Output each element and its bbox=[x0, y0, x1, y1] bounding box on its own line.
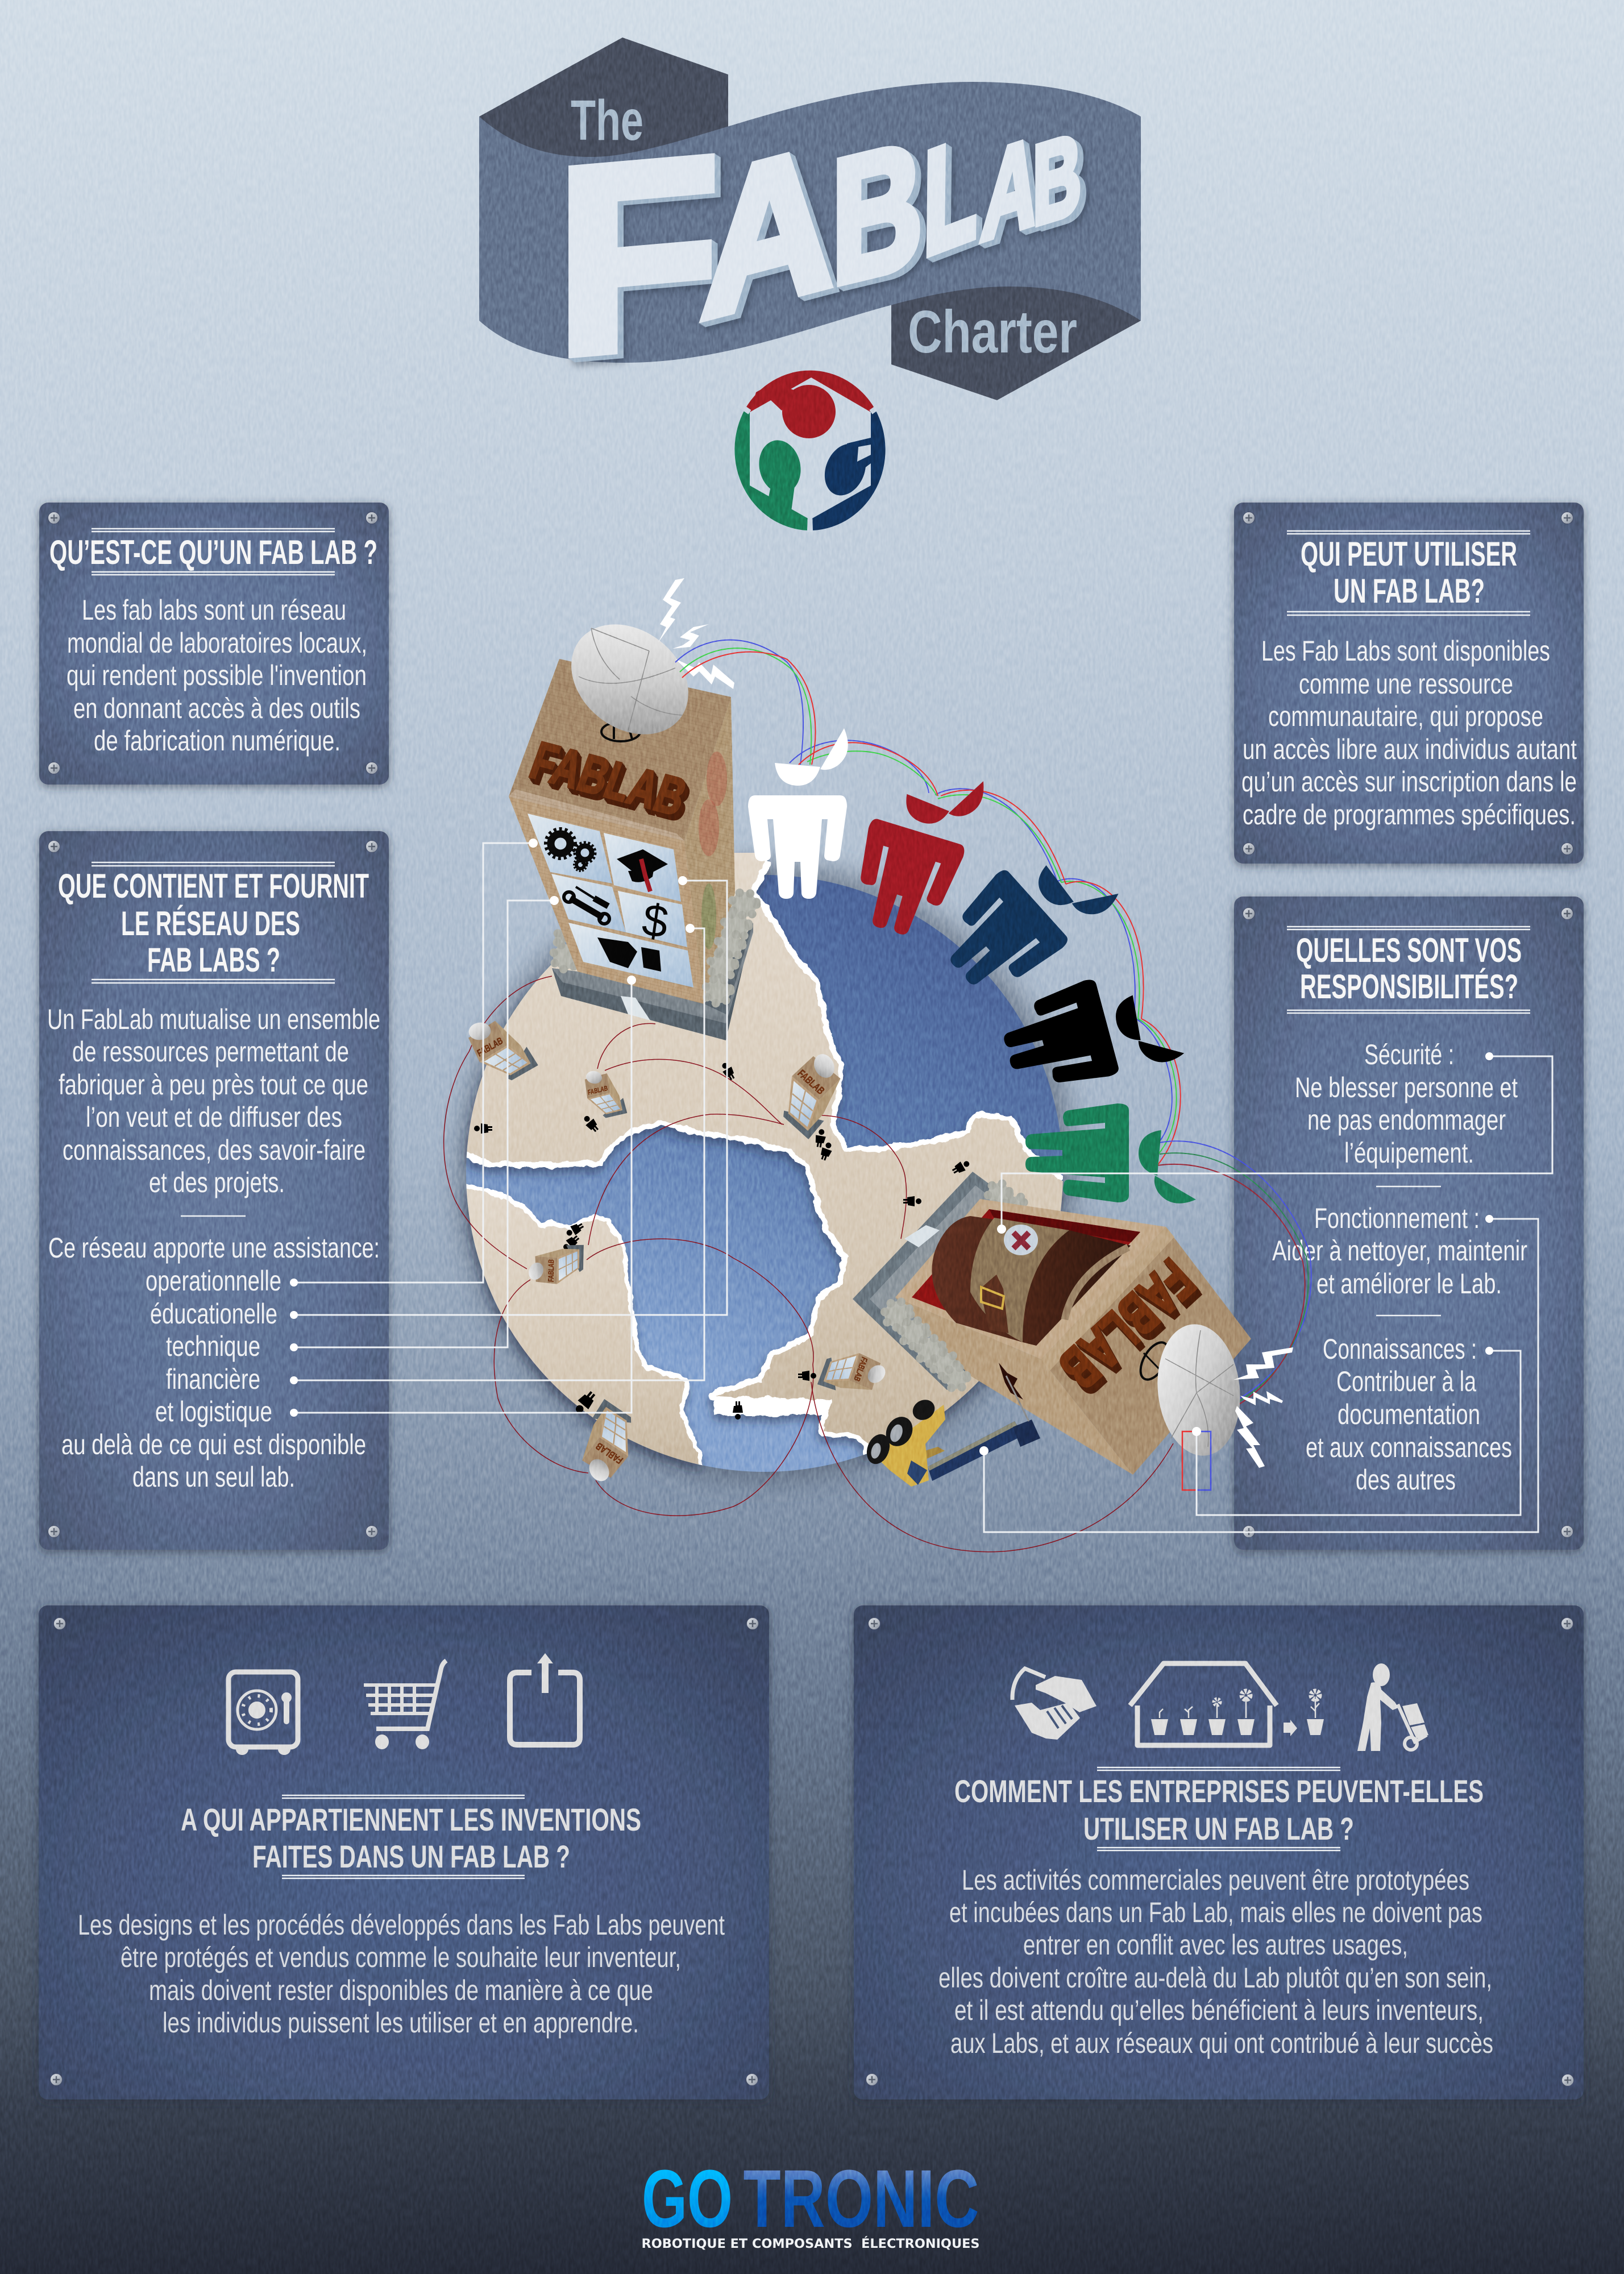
body text: communautaire, qui propose bbox=[1268, 700, 1543, 732]
heading: QUI PEUT UTILISER bbox=[1301, 535, 1517, 573]
body text: les individus puissent les utiliser et en apprendre. bbox=[163, 2007, 639, 2039]
shrubs bbox=[705, 892, 757, 1003]
body text: et aux connaissances bbox=[1306, 1431, 1512, 1463]
satellite dish bbox=[1135, 1320, 1247, 1490]
windows bbox=[528, 814, 693, 987]
heading: A QUI APPARTIENNENT LES INVENTIONS bbox=[181, 1802, 641, 1837]
body text: mais doivent rester disponibles de manière à ce que bbox=[149, 1974, 653, 2006]
icon: greenhouse with plants bbox=[1130, 1663, 1277, 1745]
body text: l’équipement. bbox=[1344, 1137, 1474, 1169]
panel: qu'est-ce qu'un fab lab bbox=[39, 503, 389, 785]
front wall bbox=[509, 796, 704, 1004]
panel: quelles sont vos responsabilités bbox=[1234, 897, 1584, 1550]
title word: FABLAB: F bbox=[556, 101, 719, 410]
body text bbox=[47, 1003, 380, 1493]
title word: FABLAB: A bbox=[978, 110, 1044, 268]
person: navy bbox=[928, 822, 1121, 1011]
body text: au delà de ce qui est disponible bbox=[61, 1429, 366, 1460]
small fab lab 5: FABLAB bbox=[594, 1441, 625, 1466]
title ribbon bbox=[479, 38, 1141, 400]
callout lines: responsibilities bbox=[979, 1052, 1552, 1532]
body text: des autres bbox=[1356, 1464, 1456, 1496]
title word: FABLAB: L bbox=[923, 105, 977, 285]
body text bbox=[1241, 635, 1577, 831]
body text: documentation bbox=[1338, 1399, 1480, 1430]
body text: Fonctionnement : bbox=[1314, 1202, 1480, 1234]
roof sign: FABLAB: FABLAB bbox=[523, 731, 694, 827]
logo: Go Tronic: GO bbox=[642, 2153, 733, 2244]
small fab lab 1: FABLAB bbox=[476, 1036, 505, 1059]
icon: share arrow bbox=[510, 1653, 580, 1745]
drum with belt bbox=[932, 1216, 1131, 1346]
body text: Ce réseau apporte une assistance: bbox=[48, 1232, 380, 1264]
body text bbox=[67, 594, 367, 757]
icon: shopping cart bbox=[364, 1661, 446, 1749]
body text: de fabrication numérique. bbox=[94, 725, 340, 757]
heading: FAB LABS ? bbox=[147, 941, 280, 979]
body text bbox=[1272, 1039, 1527, 1496]
body text: et il est attendu qu’elles bénéficient à leurs inventeurs, bbox=[954, 1994, 1484, 2026]
icon: handshake bbox=[1012, 1669, 1096, 1740]
body text: comme une ressource bbox=[1299, 668, 1513, 700]
roof bbox=[509, 659, 731, 841]
body text: éducationelle bbox=[150, 1298, 277, 1330]
panel: comment les entreprises bbox=[854, 1605, 1584, 2099]
small fab lab 3: FABLAB bbox=[795, 1068, 827, 1097]
body text: fabriquer à peu près tout ce que bbox=[59, 1069, 368, 1101]
heading bbox=[1301, 535, 1517, 610]
body text: Connaissances : bbox=[1323, 1333, 1477, 1365]
icon: dollar sign: $ bbox=[639, 894, 671, 948]
body text: technique bbox=[166, 1330, 260, 1362]
title word: The: The bbox=[571, 89, 643, 152]
small fab lab 5 bbox=[572, 1397, 643, 1491]
body text: Un FabLab mutualise un ensemble bbox=[47, 1003, 380, 1035]
box faces bbox=[895, 1199, 1166, 1359]
person: white bbox=[748, 728, 848, 899]
body text bbox=[938, 1864, 1493, 2059]
icon: box and notepad bbox=[597, 937, 661, 972]
heading bbox=[181, 1802, 641, 1874]
main fab lab building bbox=[509, 601, 757, 1040]
icon: single potted flower bbox=[1307, 1691, 1324, 1735]
body text: Les fab labs sont un réseau bbox=[82, 594, 346, 626]
satellite dish bbox=[550, 601, 710, 757]
title word: FABLAB: A bbox=[700, 101, 837, 361]
icon: graduation cap bbox=[617, 849, 668, 891]
body text: financière bbox=[166, 1363, 260, 1395]
heading: FAITES DANS UN FAB LAB ? bbox=[252, 1839, 570, 1874]
body text: Les designs et les procédés développés dans les Fab Labs peuvent bbox=[78, 1909, 725, 1941]
body text: Les activités commerciales peuvent être prototypées bbox=[962, 1864, 1469, 1896]
heading bbox=[1296, 931, 1522, 1006]
title word: FABLAB bbox=[556, 101, 1081, 410]
icon: person with hand truck bbox=[1357, 1663, 1428, 1751]
icon: wrench and screwdriver bbox=[564, 887, 609, 924]
body text: et des projets. bbox=[149, 1167, 285, 1198]
body text: l’on veut et de diffuser des bbox=[86, 1101, 342, 1133]
body text: en donnant accès à des outils bbox=[73, 692, 360, 724]
logo: Go Tronic: ROBOTIQUE ET COMPOSANTS ÉLECTRONIQUES bbox=[641, 2236, 980, 2251]
network arcs bbox=[444, 976, 1173, 1552]
body text bbox=[78, 1909, 725, 2039]
person: green bbox=[1025, 1103, 1196, 1204]
toppled fab lab box bbox=[853, 1172, 1251, 1490]
callout lines: network support bbox=[290, 839, 727, 1417]
heading bbox=[954, 1773, 1484, 1846]
person: black bbox=[995, 960, 1185, 1101]
title word: FABLAB: B bbox=[832, 103, 923, 322]
body text: mondial de laboratoires locaux, bbox=[67, 627, 367, 659]
body text: ne pas endommager bbox=[1307, 1104, 1506, 1136]
signal bolts: toppled box bbox=[1233, 1347, 1293, 1468]
body text: de ressources permettant de bbox=[72, 1036, 349, 1068]
heading: RESPONSIBILITÉS? bbox=[1300, 968, 1518, 1006]
body text: Ne blesser personne et bbox=[1295, 1072, 1518, 1103]
small fab lab 2 bbox=[575, 1061, 630, 1126]
heading: QU’EST-CE QU’UN FAB LAB ? bbox=[49, 533, 377, 571]
small fab lab 3 bbox=[770, 1041, 853, 1142]
body text: Sécurité : bbox=[1364, 1039, 1454, 1070]
side wall bbox=[684, 697, 735, 1004]
heading bbox=[58, 867, 369, 979]
icon: safe bbox=[229, 1672, 298, 1755]
box sign: FABLAB: FABLAB bbox=[1047, 1247, 1207, 1401]
title word: FABLAB: B bbox=[1033, 109, 1081, 249]
body text: être protégés et vendus comme le souhaite leur inventeur, bbox=[121, 1941, 681, 1973]
small fab lab 1 bbox=[455, 1006, 542, 1093]
panel: à qui appartiennent les inventions bbox=[39, 1605, 769, 2099]
land masses bbox=[460, 852, 1066, 1474]
signal bolts: main building bbox=[658, 578, 734, 689]
heading: LE RÉSEAU DES bbox=[121, 904, 300, 943]
person: red bbox=[842, 753, 987, 945]
small people icons bbox=[474, 1061, 971, 1420]
body text: dans un seul lab. bbox=[132, 1461, 295, 1493]
small fab lab 6 bbox=[817, 1350, 890, 1395]
body text: operationnelle bbox=[146, 1265, 281, 1297]
logo: Go Tronic: TRONIC bbox=[744, 2153, 979, 2244]
body text: qui rendent possible l'invention bbox=[67, 659, 367, 691]
small fab lab 2: FABLAB bbox=[587, 1084, 608, 1097]
shrubs bbox=[884, 1301, 967, 1389]
logo: Go Tronic bbox=[641, 2153, 980, 2251]
heading: QUE CONTIENT ET FOURNIT bbox=[58, 867, 369, 905]
toy vehicle and tube bbox=[863, 1376, 1040, 1487]
body text: entrer en conflit avec les autres usages, bbox=[1023, 1929, 1408, 1961]
icon: gears bbox=[546, 829, 595, 871]
body text: Contribuer à la bbox=[1336, 1366, 1476, 1397]
small fab lab 4: FABLAB bbox=[546, 1259, 556, 1283]
body text: et logistique bbox=[155, 1396, 272, 1428]
heading: UN FAB LAB? bbox=[1334, 572, 1485, 610]
body text: et améliorer le Lab. bbox=[1316, 1268, 1502, 1300]
panel: que contient et fournit bbox=[39, 831, 389, 1550]
icon: arrow bbox=[1284, 1720, 1297, 1736]
small fab lab 4 bbox=[521, 1241, 591, 1291]
body text: Aider à nettoyer, maintenir bbox=[1272, 1235, 1527, 1267]
small fab lab 6: FABLAB bbox=[852, 1355, 869, 1383]
body text: connaissances, des savoir-faire bbox=[63, 1134, 365, 1166]
globe bbox=[426, 847, 1114, 1512]
panel: qui peut utiliser bbox=[1234, 503, 1584, 864]
icon: fab foundation logo bbox=[734, 371, 886, 532]
title word: Charter: Charter bbox=[908, 298, 1077, 366]
heading: UTILISER UN FAB LAB ? bbox=[1083, 1811, 1354, 1846]
RGB signal arcs bbox=[675, 640, 1311, 1404]
